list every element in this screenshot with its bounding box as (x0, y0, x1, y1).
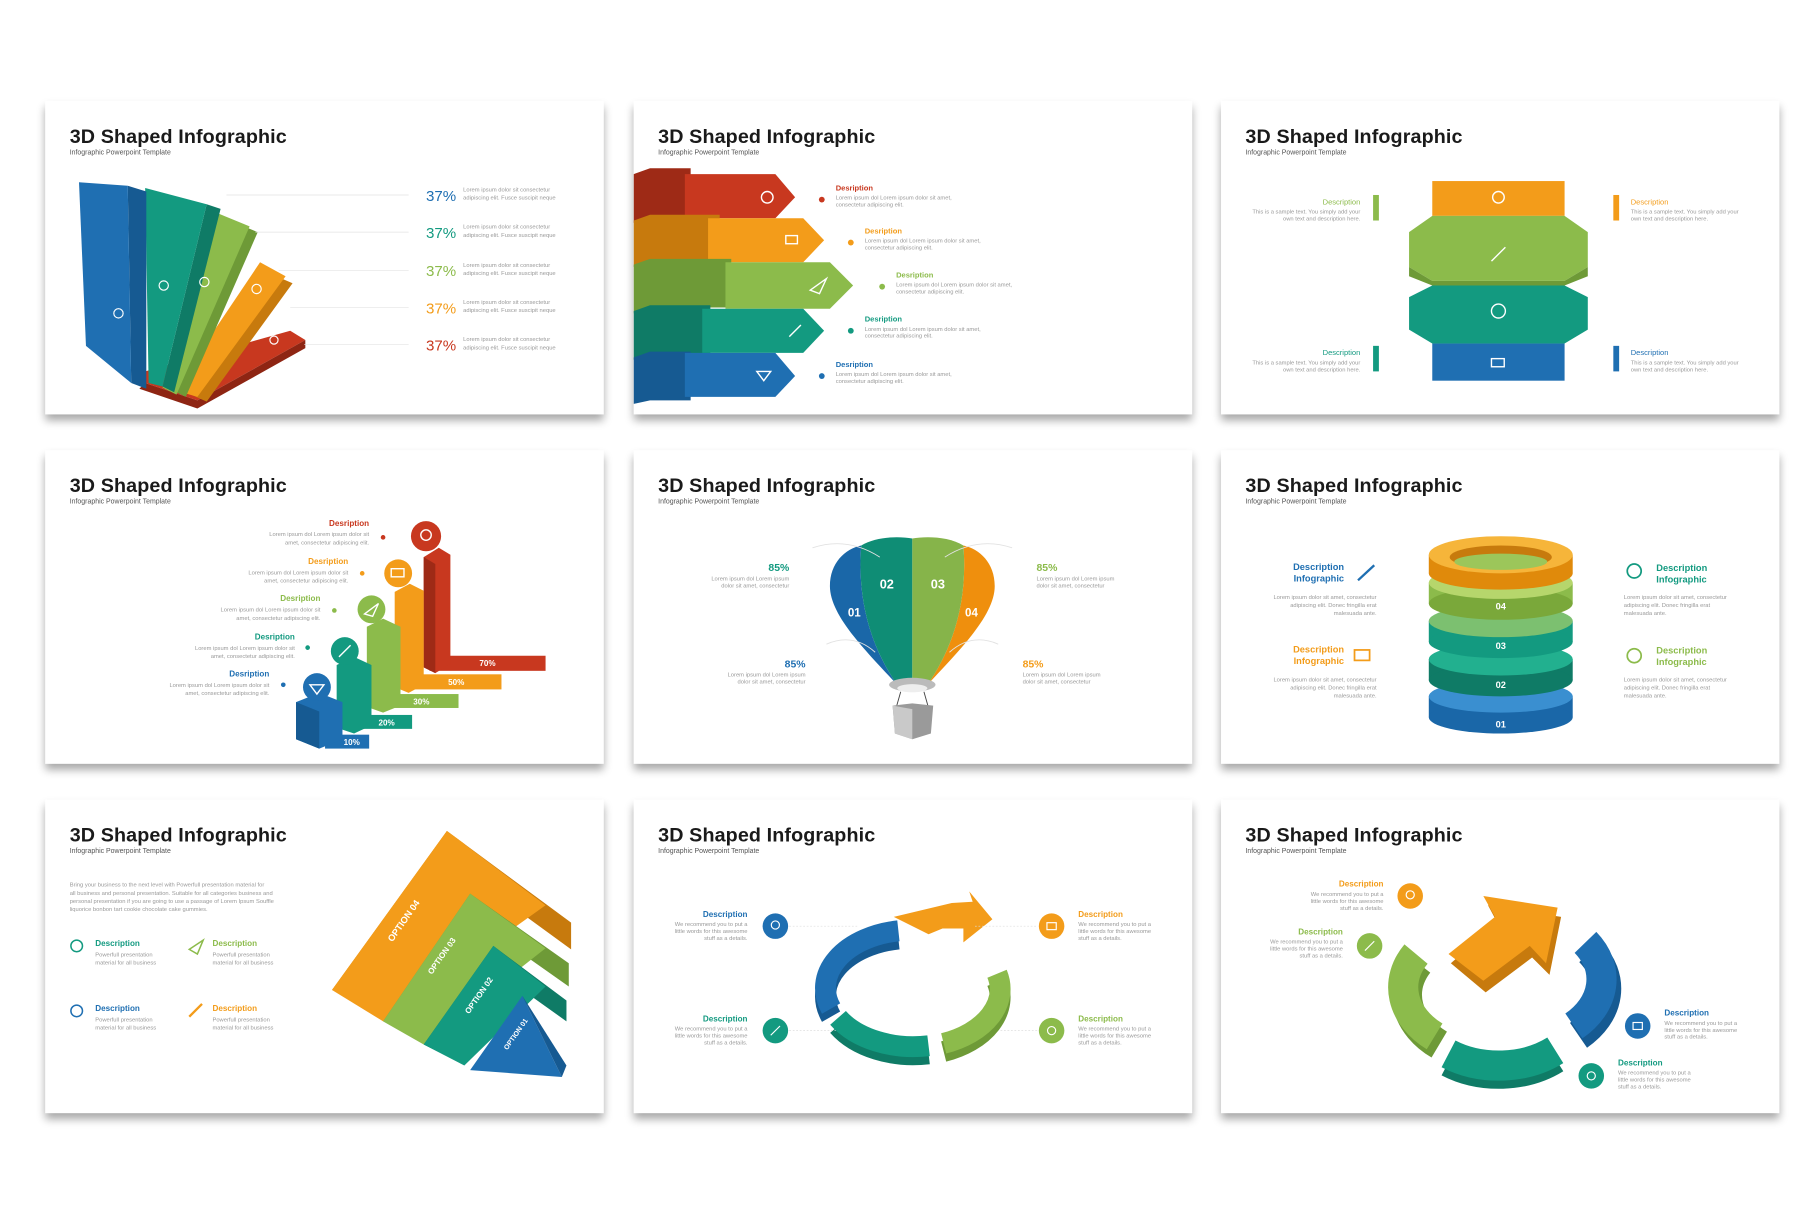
descriptions: Lorem ipsum dol Lorem ipsum dolor sit (169, 683, 270, 689)
panel: pyramid slide (45, 800, 604, 1113)
icons and descriptions (1270, 880, 1738, 1091)
chart: hot air balloon: 02 (880, 576, 894, 591)
descriptions: Desription (308, 557, 348, 566)
chart: cycle arrows (1403, 896, 1606, 1074)
icons and descriptions: We recommend you to put a (1078, 1027, 1152, 1033)
descriptions: Desription (865, 314, 902, 323)
descriptions: This is a sample text. You simply add your (1252, 360, 1360, 366)
descriptions: own text and description here. (1631, 367, 1708, 373)
stats: Lorem ipsum dol Lorem ipsum (1037, 576, 1115, 582)
icons and descriptions: little words for this awesome (675, 929, 748, 935)
descriptions: Lorem ipsum dol Lorem ipsum dolor sit amet, (865, 327, 981, 333)
descriptions: Desription (865, 226, 902, 235)
chart: stacked 3D arrows (634, 168, 853, 404)
icons and descriptions: Description (1078, 910, 1123, 919)
icons and descriptions: Description (1618, 1058, 1663, 1067)
chart: stacked layers (1409, 181, 1588, 381)
descriptions: Description (1323, 197, 1360, 206)
descriptions: Description (1631, 197, 1668, 206)
option items (71, 939, 273, 1031)
chart: 3D pyramid chevrons (332, 831, 571, 1077)
icons and descriptions: stuff as a details. (1078, 1041, 1122, 1047)
stats: dolor sit amet, consectetur (1037, 583, 1105, 589)
option items: material for all business (212, 960, 273, 966)
legend rows: 37% (426, 188, 456, 205)
icons and descriptions: little words for this awesome (1664, 1028, 1737, 1034)
title: 3D Shaped Infographic (70, 126, 287, 148)
legend rows: 37% (426, 300, 456, 317)
option items: Description (212, 939, 257, 948)
descriptions: malesuada ante. (1624, 611, 1667, 617)
descriptions: malesuada ante. (1624, 694, 1667, 700)
icons and descriptions: We recommend you to put a (675, 1027, 748, 1033)
legend rows: adipiscing elit. Fusce suscipit neque (463, 308, 556, 314)
descriptions: malesuada ante. (1334, 611, 1377, 617)
legend rows: 37% (426, 338, 456, 355)
descriptions: own text and description here. (1631, 217, 1708, 223)
descriptions: Desription (836, 183, 873, 192)
title: 3D Shaped Infographic (658, 475, 875, 497)
option items: Description (95, 939, 140, 948)
icons and descriptions: Description (1078, 1014, 1123, 1023)
descriptions: Description (1656, 563, 1708, 573)
descriptions: own text and description here. (1283, 367, 1361, 373)
chart: stacked rings: 03 (1496, 641, 1506, 651)
stats: 85% (785, 659, 806, 670)
stats: 85% (1037, 563, 1057, 574)
icons and descriptions: We recommend you to put a (675, 922, 748, 928)
chart: cycle arrows (825, 931, 1000, 1055)
icons and descriptions: We recommend you to put a (1664, 1021, 1738, 1027)
title: 3D Shaped Infographic (70, 475, 287, 497)
icons and descriptions: stuff as a details. (1340, 906, 1384, 912)
chart: 3D pyramid chevrons: OPTION 01 (503, 1018, 530, 1052)
descriptions: adipiscing elit. Donec fringilla erat (1624, 685, 1711, 691)
icons and descriptions: stuff as a details. (1664, 1035, 1708, 1041)
icons and descriptions: little words for this awesome (675, 1034, 748, 1040)
descriptions: amet, consectetur adipiscing elit. (236, 616, 321, 622)
descriptions: consectetur adipiscing elit. (865, 334, 933, 340)
option items: Powerfull presentation (95, 952, 153, 958)
descriptions: Lorem ipsum dolor sit amet, consectetur (1624, 677, 1727, 683)
descriptions: Lorem ipsum dol Lorem ipsum dolor sit (269, 532, 370, 538)
stats: 85% (768, 563, 789, 574)
descriptions: Lorem ipsum dolor sit amet, consectetur (1273, 677, 1377, 683)
subtitle: Infographic Powerpoint Template (70, 848, 171, 855)
descriptions (819, 183, 1012, 385)
stats: dolor sit amet, consectetur (738, 680, 806, 686)
descriptions (169, 519, 385, 697)
chart: hot air balloon: 01 (848, 606, 861, 619)
subtitle: Infographic Powerpoint Template (70, 149, 171, 156)
icons and descriptions: Description (1339, 880, 1384, 889)
icons and descriptions: little words for this awesome (1078, 1034, 1151, 1040)
option items: material for all business (95, 1025, 156, 1031)
descriptions: Description (1656, 645, 1708, 655)
title: 3D Shaped Infographic (1245, 475, 1462, 497)
descriptions: amet, consectetur adipiscing elit. (264, 579, 349, 585)
legend rows: Lorem ipsum dolor sit consectetur (463, 225, 550, 231)
title: 3D Shaped Infographic (658, 126, 875, 148)
legend rows: adipiscing elit. Fusce suscipit neque (463, 345, 556, 351)
legend rows (226, 188, 556, 355)
chart: stacked rings: 04 (1496, 601, 1507, 611)
option items: Description (212, 1004, 257, 1013)
intro text: Bring your business to the next level with Powerfull presentation material for (70, 883, 264, 889)
option items: Powerfull presentation (212, 1017, 270, 1023)
subtitle: Infographic Powerpoint Template (70, 499, 171, 506)
chart: stacked rings (1429, 536, 1573, 734)
title: 3D Shaped Infographic (1245, 126, 1462, 148)
icons and descriptions: stuff as a details. (1078, 936, 1122, 942)
legend rows: Lorem ipsum dolor sit consectetur (463, 337, 550, 343)
intro text: liquorice bonbon tart cookie chocolate cake gummies. (70, 907, 208, 913)
descriptions: Infographic (1294, 573, 1344, 583)
stats: dolor sit amet, consectetur (721, 583, 789, 589)
panel: step bars slide (45, 450, 604, 764)
icons and descriptions: little words for this awesome (1270, 947, 1343, 953)
option items: material for all business (212, 1025, 273, 1031)
stats: Lorem ipsum dol Lorem ipsum (728, 673, 806, 679)
subtitle: Infographic Powerpoint Template (1245, 848, 1347, 855)
descriptions: Lorem ipsum dolor sit amet, consectetur (1624, 595, 1727, 601)
stats: dolor sit amet, consectetur (1023, 680, 1091, 686)
descriptions: own text and description here. (1283, 217, 1361, 223)
title: 3D Shaped Infographic (70, 824, 287, 846)
descriptions: Lorem ipsum dol Lorem ipsum dolor sit (195, 646, 295, 652)
descriptions (1273, 562, 1727, 700)
intro text: personal presentation if you are going to use a passage of Lorem Ipsum Souffle (70, 899, 274, 905)
icons and descriptions: Description (703, 910, 748, 919)
icons and descriptions: stuff as a details. (1618, 1085, 1662, 1091)
descriptions: consectetur adipiscing elit. (865, 246, 933, 252)
stats: 85% (1023, 659, 1043, 670)
chart: 3D steps (296, 521, 546, 749)
legend rows: adipiscing elit. Fusce suscipit neque (463, 271, 556, 277)
intro text: all business and personal presentation. Suitable for all categories business and (70, 891, 273, 897)
descriptions: Desription (255, 632, 295, 641)
icons and descriptions: stuff as a details. (704, 936, 748, 942)
descriptions: Desription (896, 270, 934, 279)
panel: stacked hexagon slide (1221, 101, 1779, 414)
title: 3D Shaped Infographic (1245, 824, 1462, 846)
descriptions: Description (1293, 644, 1344, 654)
icons and descriptions: stuff as a details. (704, 1041, 748, 1047)
descriptions: Desription (229, 670, 269, 679)
chart: 3D steps: 50% (448, 678, 464, 687)
icons and descriptions: little words for this awesome (1618, 1078, 1691, 1084)
chart: 3D pyramid chevrons: OPTION 04 (386, 897, 422, 944)
subtitle: Infographic Powerpoint Template (1245, 499, 1347, 506)
option items: Powerfull presentation (212, 952, 270, 958)
stats: Lorem ipsum dol Lorem ipsum (711, 576, 789, 582)
legend rows: 37% (426, 263, 456, 280)
panel: fan bars slide (45, 101, 604, 414)
chart: 3D steps: 30% (413, 697, 429, 706)
icons and descriptions: We recommend you to put a (1078, 922, 1152, 928)
descriptions: Infographic (1294, 656, 1344, 666)
icons and descriptions: Description (1664, 1009, 1709, 1018)
descriptions: Description (1323, 348, 1360, 357)
chart: stacked rings: 01 (1496, 720, 1506, 730)
descriptions: Desription (329, 519, 369, 528)
intro text (70, 883, 274, 913)
legend rows: adipiscing elit. Fusce suscipit neque (463, 233, 556, 239)
icons and descriptions: stuff as a details. (1300, 954, 1343, 960)
descriptions: Description (1293, 562, 1344, 572)
descriptions: adipiscing elit. Donec fringilla erat (1624, 603, 1711, 609)
chart: 3D fan bars (79, 182, 305, 409)
chart: stacked rings: 02 (1496, 680, 1506, 690)
descriptions: malesuada ante. (1334, 694, 1377, 700)
legend rows: adipiscing elit. Fusce suscipit neque (463, 196, 556, 202)
icons and descriptions: little words for this awesome (1311, 899, 1384, 905)
subtitle: Infographic Powerpoint Template (1245, 149, 1347, 156)
icons and descriptions (675, 910, 1152, 1047)
icons and descriptions: We recommend you to put a (1311, 892, 1384, 898)
panel: rings slide (1221, 450, 1779, 764)
subtitle: Infographic Powerpoint Template (658, 499, 759, 506)
descriptions: Lorem ipsum dol Lorem ipsum dolor sit amet, (836, 372, 952, 378)
option items: material for all business (95, 960, 156, 966)
legend rows: 37% (426, 225, 456, 242)
descriptions: Lorem ipsum dol Lorem ipsum dolor sit amet, (865, 239, 981, 245)
descriptions: Desription (836, 360, 873, 369)
panel: arrows slide (634, 101, 1192, 414)
descriptions: consectetur adipiscing elit. (836, 379, 904, 385)
descriptions: Lorem ipsum dol Lorem ipsum dolor sit amet, (836, 196, 952, 202)
descriptions: amet, consectetur adipiscing elit. (285, 540, 370, 546)
descriptions: adipiscing elit. Donec fringilla erat (1290, 603, 1377, 609)
option items: Description (95, 1004, 140, 1013)
descriptions: amet, consectetur adipiscing elit. (185, 691, 270, 697)
icons and descriptions: Description (1298, 927, 1343, 936)
descriptions: amet, consectetur adipiscing elit. (211, 654, 295, 660)
descriptions: Lorem ipsum dol Lorem ipsum dolor sit (221, 608, 321, 614)
descriptions: Infographic (1656, 575, 1707, 585)
descriptions: Desription (280, 594, 320, 603)
descriptions: consectetur adipiscing elit. (836, 203, 904, 209)
arrow: orange top (894, 891, 992, 942)
descriptions: Lorem ipsum dolor sit amet, consectetur (1273, 595, 1377, 601)
title: 3D Shaped Infographic (658, 824, 875, 846)
icons and descriptions: We recommend you to put a (1270, 940, 1344, 946)
panel: circular arrows slide (634, 800, 1192, 1113)
chart: 3D pyramid chevrons: OPTION 03 (426, 936, 458, 976)
panel: big cycle arrows slide (1221, 800, 1779, 1113)
option items: Powerfull presentation (95, 1017, 153, 1023)
chart: 3D steps: 20% (378, 718, 395, 727)
subtitle: Infographic Powerpoint Template (658, 848, 759, 855)
descriptions: Infographic (1656, 657, 1707, 667)
descriptions: Lorem ipsum dol Lorem ipsum dolor sit amet, (896, 283, 1012, 289)
chart: 3D steps: 10% (344, 738, 360, 747)
icons and descriptions: We recommend you to put a (1618, 1071, 1691, 1077)
descriptions: Description (1631, 348, 1668, 357)
panel: balloon slide (634, 450, 1192, 764)
legend rows: Lorem ipsum dolor sit consectetur (463, 188, 550, 194)
chart: 3D steps: 70% (479, 659, 496, 668)
icons and descriptions: little words for this awesome (1078, 929, 1151, 935)
subtitle: Infographic Powerpoint Template (658, 149, 759, 156)
icons and descriptions: Description (703, 1014, 748, 1023)
descriptions: Lorem ipsum dol Lorem ipsum dolor sit (248, 571, 349, 577)
descriptions: This is a sample text. You simply add your (1631, 360, 1739, 366)
descriptions: This is a sample text. You simply add your (1631, 210, 1739, 216)
descriptions: adipiscing elit. Donec fringilla erat (1290, 685, 1377, 691)
chart: hot air balloon: 04 (965, 606, 979, 619)
chart: 3D pyramid chevrons: OPTION 02 (463, 975, 495, 1016)
descriptions: This is a sample text. You simply add your (1252, 210, 1360, 216)
descriptions: consectetur adipiscing elit. (896, 290, 964, 296)
stats (711, 544, 1115, 686)
chart: hot air balloon (830, 537, 995, 739)
legend rows: Lorem ipsum dolor sit consectetur (463, 263, 550, 269)
chart: hot air balloon: 03 (931, 576, 945, 591)
stats: Lorem ipsum dol Lorem ipsum (1023, 673, 1101, 679)
legend rows: Lorem ipsum dolor sit consectetur (463, 300, 550, 306)
descriptions (1252, 195, 1739, 373)
